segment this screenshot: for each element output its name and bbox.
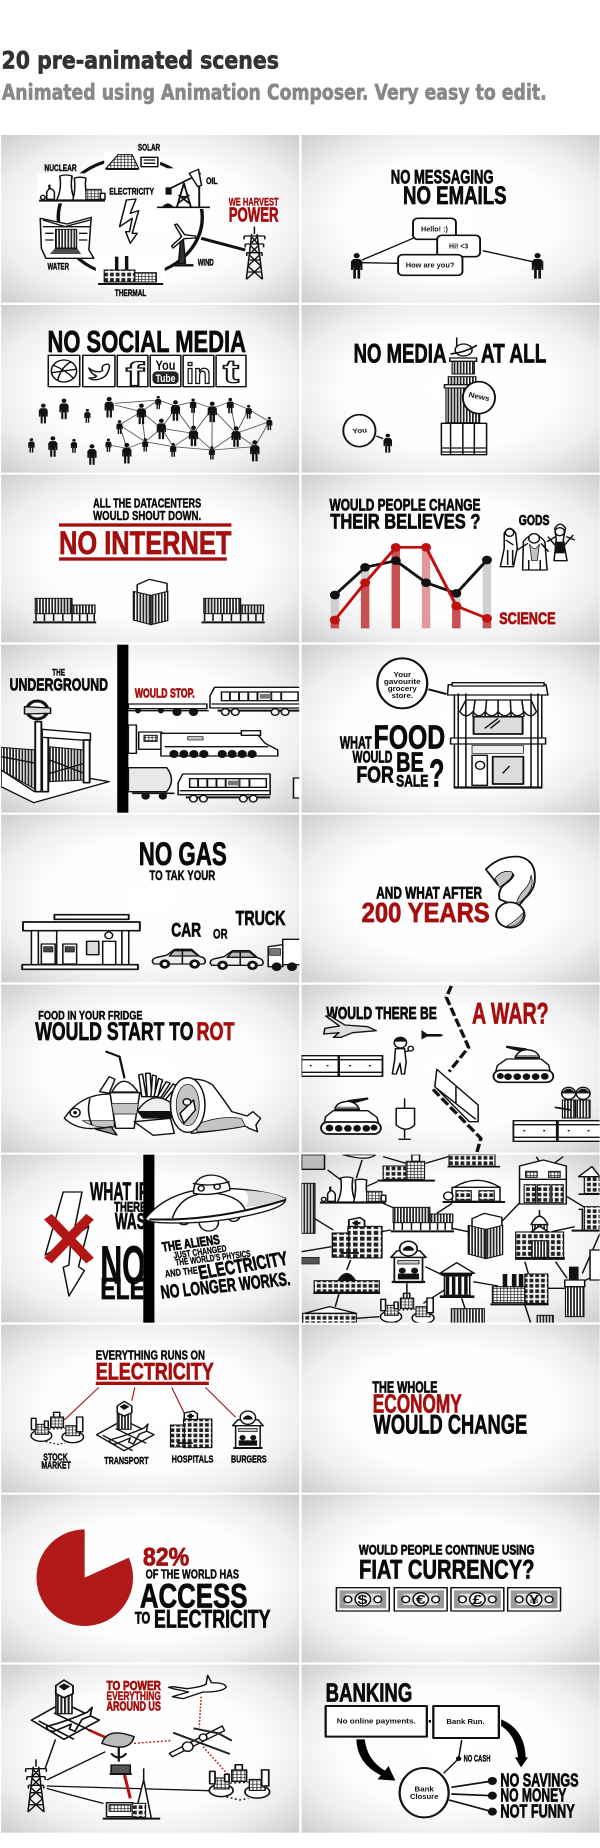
icon: power line (201, 238, 245, 250)
bank closure circle: Closure (410, 1793, 439, 1801)
heading: AND WHAT AFTER (376, 883, 482, 902)
heading: underground (10, 668, 108, 694)
labels: HOSPITALS (172, 1454, 213, 1465)
people (351, 253, 543, 279)
heading: 200 YEARS (362, 898, 490, 928)
icon: water dam (40, 217, 94, 258)
icon: vehicles (152, 939, 306, 971)
callout bubble: store. (392, 692, 413, 700)
chart (330, 543, 492, 628)
heading: ALL THE DATACENTERS (93, 497, 201, 510)
or label: OR (213, 927, 228, 942)
box: no online payments (326, 1706, 427, 1737)
panel: what food (302, 645, 600, 813)
heading: NO SOCIAL MEDIA (48, 324, 246, 358)
icon: satellite dish (102, 1733, 134, 1774)
news bubble: News (468, 390, 491, 403)
row group offset for panels 17 to 20 (1, 1495, 600, 1833)
heading: FOOD IN YOUR FRIDGE (38, 1008, 143, 1022)
labels: NUCLEAR (44, 164, 77, 174)
panel: city network (302, 1155, 600, 1325)
panel: would people change their believes (302, 475, 600, 642)
no cash link: NO CASH (464, 1754, 490, 1764)
aliens text: JUST CHANGED (173, 1244, 227, 1261)
labels: THERMAL (115, 289, 146, 299)
row group offset for panels 9 to 12 (1, 815, 600, 1153)
curved arrow left (356, 1739, 395, 1781)
truck label: TRUCK (236, 906, 285, 930)
labels: STOCK (43, 1452, 68, 1463)
icon: soldiers (555, 1087, 590, 1118)
icon: tank left (321, 1097, 381, 1134)
banknotes: ¥ (529, 1593, 540, 1607)
callout bubble: Your (393, 671, 411, 679)
you bubble (343, 415, 383, 447)
heading: underground: UNDERGROUND (10, 675, 108, 694)
icon: lightning (120, 199, 139, 243)
aliens text (159, 1233, 292, 1303)
statistic text: 82% (143, 1542, 189, 1571)
icon: crossed bolt (45, 1192, 90, 1296)
icon: food pile (64, 1051, 261, 1135)
icon: oil pump (157, 168, 211, 209)
box: bank run: Bank Run. (446, 1718, 485, 1726)
labels: WIND (198, 258, 214, 268)
icon: stock market (31, 1412, 84, 1444)
statistic text: OF THE WORLD HAS (146, 1567, 239, 1582)
heading (107, 1679, 161, 1713)
icon: missile (421, 1030, 443, 1039)
icon: plane (169, 1675, 226, 1699)
heading: FOOD (374, 718, 445, 756)
heading: WOULD START TO (35, 1017, 193, 1046)
person (383, 434, 392, 453)
heading: NO EMAILS (403, 182, 507, 210)
icon: question mark (486, 857, 535, 928)
labels: WATER (48, 262, 69, 272)
banknotes: £ (472, 1593, 483, 1607)
heading: ECONOMY (373, 1389, 462, 1418)
bank closure circle (400, 1768, 449, 1817)
heading: THE WHOLE (372, 1379, 438, 1396)
city buildings (302, 1155, 600, 1325)
heading: NO GAS (139, 837, 227, 872)
no cash link (444, 1740, 490, 1773)
panel: food rot (1, 985, 299, 1153)
panel: 82 percent (1, 1495, 299, 1662)
box: no online payments: No online payments. (337, 1717, 416, 1726)
heading: AROUND US (107, 1700, 161, 1713)
outcome branches (449, 1777, 497, 1816)
no internet banner: NO INTERNET (59, 525, 232, 561)
heading: BE (396, 748, 424, 778)
energy ring (58, 158, 202, 277)
icon: solar panels (104, 152, 160, 171)
heading: THEIR BELIEVES ? (330, 509, 480, 533)
chat bubbles: How are you? (406, 261, 455, 270)
outcomes (500, 1771, 579, 1822)
icon: transport (97, 1401, 154, 1451)
car label: CAR (171, 920, 201, 941)
labels: ELECTRICITY (109, 187, 154, 197)
icon: airport (31, 1680, 99, 1739)
row group offset for panels 5 to 8 (1, 475, 600, 813)
panel: the underground (1, 645, 302, 813)
statistic text: TO (135, 1608, 150, 1627)
icon: jet (324, 1016, 376, 1037)
icon: hospitals (170, 1411, 212, 1448)
icon: grocery store (448, 683, 548, 788)
heading (330, 496, 480, 533)
science label: SCIENCE (499, 609, 556, 628)
box: bank run (433, 1706, 499, 1738)
heading: WOULD PEOPLE CHANGE (330, 496, 480, 514)
heading: WOULD (352, 748, 392, 766)
icon: burgers (233, 1411, 263, 1449)
panel: we harvest power (1, 135, 299, 303)
panel: no messaging (302, 135, 600, 303)
curved arrow right (501, 1719, 528, 1767)
heading: WOULD THERE BE (326, 1003, 437, 1023)
heading: BANKING (326, 1678, 412, 1707)
network lines (302, 1157, 600, 1323)
banknotes: € (416, 1593, 426, 1607)
heading: SALE (396, 772, 428, 790)
trains (128, 687, 302, 802)
border dashed line (433, 986, 481, 1152)
barriers (302, 1056, 382, 1076)
row group offset for panels 13 to 16 (1, 1155, 600, 1493)
statistic text: ELECTRICITY (154, 1605, 271, 1633)
heading: WOULD SHOUT DOWN. (93, 509, 201, 524)
social icons (48, 355, 246, 393)
labels: WE HARVEST (229, 197, 279, 208)
icon: pylon (26, 1759, 46, 1812)
social icons: t (223, 355, 240, 390)
icon: stock market (209, 1765, 270, 1800)
icon: flag (396, 1098, 415, 1139)
banknotes: $ (357, 1593, 368, 1607)
icon: nuclear plant (38, 173, 107, 203)
callout bubble (377, 658, 446, 708)
news bubble (463, 382, 495, 414)
panel: no internet (1, 475, 299, 642)
clipped heading: THERE (114, 1200, 146, 1215)
labels: OIL (206, 177, 218, 187)
clipped heading: ELE (100, 1271, 145, 1305)
divider bar (117, 645, 128, 813)
panel: no media at all (302, 305, 600, 473)
icon: soldier (392, 1037, 413, 1074)
icon: gods (500, 524, 575, 570)
clipped heading: WAS (115, 1210, 146, 1235)
heading: FOR (356, 762, 394, 788)
panel: a war (302, 985, 600, 1153)
social icons: Tube (156, 372, 176, 385)
heading (139, 837, 227, 884)
panel: everything runs on electricity (1, 1325, 299, 1493)
panel: to power everything (1, 1665, 299, 1833)
banknotes (336, 1588, 561, 1611)
social icons: in (186, 357, 211, 390)
chat bubbles (398, 218, 480, 275)
panel: aliens: WHAT IF (90, 1177, 148, 1206)
callout bubble: grocery (388, 685, 417, 693)
callout bubble: gavourite (384, 678, 421, 686)
heading: WHAT (340, 733, 372, 753)
icon: underground station (1, 701, 109, 803)
heading (362, 883, 490, 928)
heading: ELECTRICITY (96, 1359, 214, 1385)
heading: ? (429, 751, 444, 795)
labels (44, 143, 279, 299)
panel: no gas (1, 815, 306, 982)
labels: BURGERS (231, 1454, 267, 1465)
heading (391, 167, 507, 210)
you bubble: You (352, 426, 368, 435)
statistic text: ACCESS (140, 1577, 248, 1615)
chat bubbles: Hi! <3 (449, 242, 468, 251)
panel: and what after 200 years (302, 815, 600, 982)
no internet banner (59, 523, 232, 561)
barriers right (513, 1121, 600, 1141)
heading: EVERYTHING RUNS ON (96, 1348, 205, 1362)
clipped heading (90, 1182, 144, 1300)
icon: gas station (22, 915, 140, 969)
heading (96, 1348, 214, 1385)
diagonal barrier (435, 1069, 478, 1122)
panel: the whole economy (302, 1325, 600, 1493)
panel: fiat currency (302, 1495, 600, 1662)
heading: EVERYTHING (107, 1689, 161, 1703)
gods label: GODS (519, 513, 549, 529)
heading: would stop: WOULD STOP. (135, 686, 195, 700)
icon: wind turbine (172, 224, 195, 265)
icon: pylon (244, 227, 265, 279)
icon: space station (169, 1726, 232, 1757)
heading: TO TAK YOUR (149, 868, 215, 884)
heading (35, 1008, 235, 1046)
aliens text: AND THE (164, 1265, 199, 1280)
heading: NO MEDIA (354, 339, 446, 369)
panel: no social media (1, 305, 299, 473)
icon: tank right (493, 1046, 553, 1082)
network lines (108, 400, 269, 450)
statistic text (135, 1542, 271, 1633)
aliens text: THE WORLD'S PHYSICS (175, 1249, 252, 1268)
title: 20 pre-animated scenes (2, 47, 279, 75)
social icons: f (126, 355, 146, 393)
icon: school (103, 1768, 160, 1819)
panel: banking (302, 1665, 600, 1833)
icon: ufo (146, 1175, 286, 1231)
aliens text: NO LONGER WORKS. (159, 1269, 292, 1303)
heading: A WAR? (472, 996, 549, 1030)
bank closure circle: Bank (415, 1785, 434, 1794)
icon: thermal plant (96, 255, 165, 287)
aliens text: ELECTRICITY (196, 1248, 290, 1284)
black links (45, 1739, 209, 1803)
aliens text: THE ALIENS (161, 1233, 221, 1255)
heading (340, 718, 445, 795)
connector lines (362, 238, 533, 263)
icon: media tower (441, 337, 487, 455)
heading (359, 1542, 534, 1585)
labels: TRANSPORT (104, 1456, 149, 1467)
pie chart (37, 1529, 133, 1626)
labels: SOLAR (138, 143, 160, 153)
heading: ROT (197, 1017, 235, 1046)
labels: POWER (229, 204, 279, 226)
heading: NO MESSAGING (391, 167, 493, 188)
heading: underground: THE (52, 668, 65, 678)
clipped heading: NO (100, 1236, 146, 1295)
datacenters (33, 579, 265, 625)
connector lines (64, 1387, 236, 1420)
social icons: You (156, 358, 175, 374)
heading (93, 497, 201, 524)
heading: TO POWER (107, 1679, 161, 1693)
panel: aliens (1, 1155, 299, 1323)
heading (372, 1379, 527, 1440)
chat bubbles: Hello! :) (421, 225, 448, 233)
heading: AT ALL (481, 339, 546, 369)
labels (41, 1452, 267, 1471)
divider bar (143, 1155, 154, 1323)
red links (89, 1730, 130, 1798)
labels: MARKET (41, 1460, 71, 1471)
crowd (28, 396, 272, 465)
